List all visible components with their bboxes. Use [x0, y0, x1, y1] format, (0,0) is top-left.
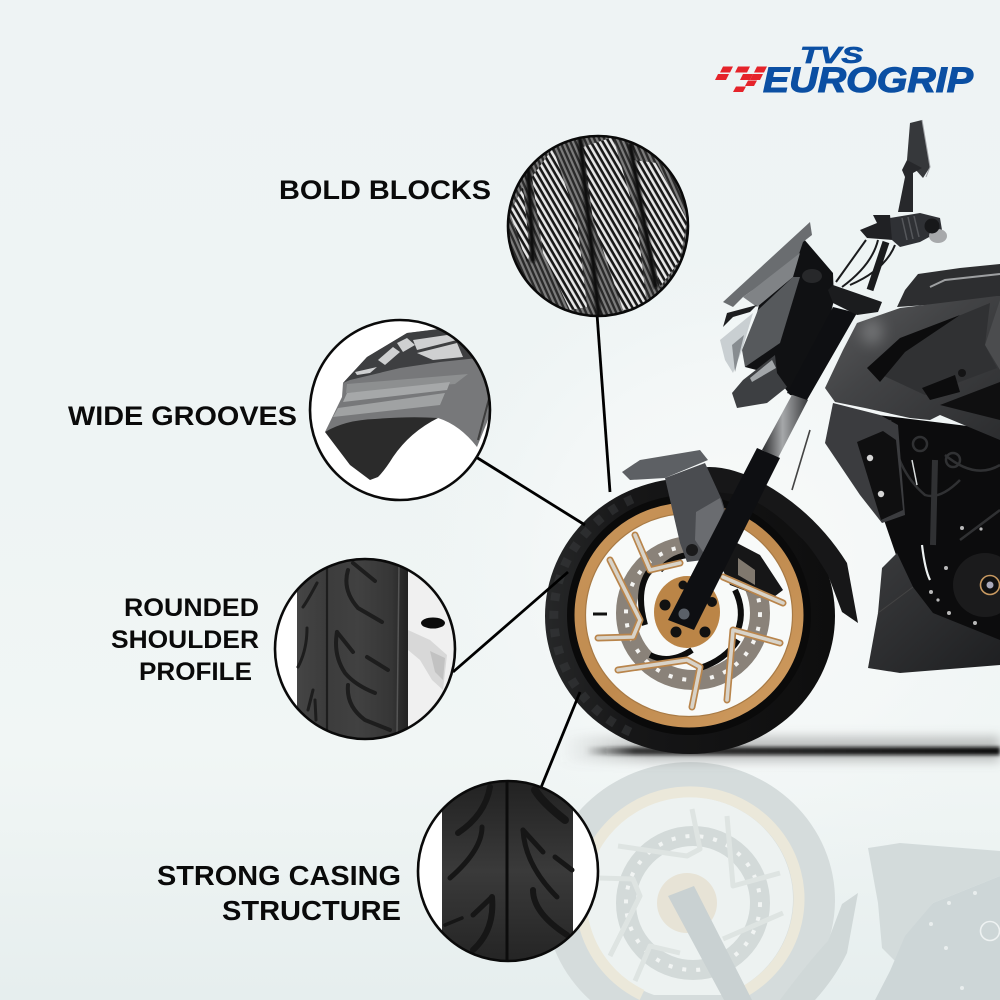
- fender tip: [622, 450, 708, 480]
- fender bracket: [665, 463, 725, 562]
- tyre cross-section: [325, 328, 492, 447]
- fork stanchion: [762, 393, 808, 458]
- headlight mask: [720, 269, 822, 408]
- engine details: [890, 420, 1000, 580]
- rear body: engine block: [878, 415, 1000, 645]
- label: strong casing structure: STRONG CASING: [157, 860, 401, 891]
- leader lines: [453, 314, 610, 790]
- logo checkered flag: [715, 66, 767, 92]
- label: rounded shoulder profile: ROUNDED: [124, 594, 259, 622]
- handlebar and mirror: [836, 120, 947, 290]
- logo wordmark TVS: TVS: [800, 42, 864, 68]
- label: rounded shoulder profile: SHOULDER: [111, 626, 259, 654]
- fork lower leg: [668, 448, 780, 630]
- label: bold blocks: BOLD BLOCKS: [279, 175, 491, 205]
- windscreen: [723, 222, 812, 307]
- wheel opening: [585, 513, 793, 717]
- tank top: [897, 264, 1000, 307]
- panel: rounded shoulder circle: [275, 555, 458, 745]
- rim spokes: [598, 535, 783, 707]
- tyre: [545, 478, 835, 754]
- radiator plate: [857, 431, 903, 520]
- motorcycle reflection on floor: [545, 762, 1000, 1000]
- headlight shell: [745, 238, 834, 398]
- gold rim: [580, 508, 798, 722]
- brake caliper: [718, 543, 783, 600]
- radiator shroud: [825, 403, 905, 523]
- wheel: [545, 478, 835, 754]
- motorcycle: [545, 120, 1000, 754]
- fork upper tube: [787, 307, 857, 400]
- ground shadow: [560, 736, 1000, 762]
- logo: TVS Eurogrip: [715, 42, 974, 100]
- tank shroud: [825, 296, 1000, 440]
- gold hub: [654, 576, 720, 648]
- shroud dark inset: [861, 300, 1000, 420]
- logo wordmark Eurogrip: EUROGRIP: [763, 61, 974, 100]
- tread grooves: [298, 555, 390, 745]
- label: rounded shoulder profile: PROFILE: [139, 658, 252, 686]
- brake line: [792, 430, 810, 490]
- belly pan: [868, 553, 1000, 673]
- triple clamp: [828, 285, 882, 315]
- engine side cover: [929, 526, 1000, 625]
- windscreen lower strip: [743, 253, 800, 307]
- panel: bold blocks circle: [505, 134, 691, 318]
- label: rounded shoulder profile: [111, 594, 259, 686]
- front fender rear section: [690, 467, 858, 623]
- label: wide grooves: WIDE GROOVES: [68, 401, 297, 431]
- label: strong casing structure: STRUCTURE: [222, 895, 401, 926]
- brake disc: [626, 546, 760, 680]
- label: strong casing structure: [157, 860, 401, 926]
- panel: strong casing circle: [418, 778, 598, 964]
- valve: [593, 612, 607, 616]
- rim section: [408, 572, 454, 726]
- steel cord bright strands: [510, 137, 687, 310]
- panel: wide grooves circle: [310, 320, 492, 500]
